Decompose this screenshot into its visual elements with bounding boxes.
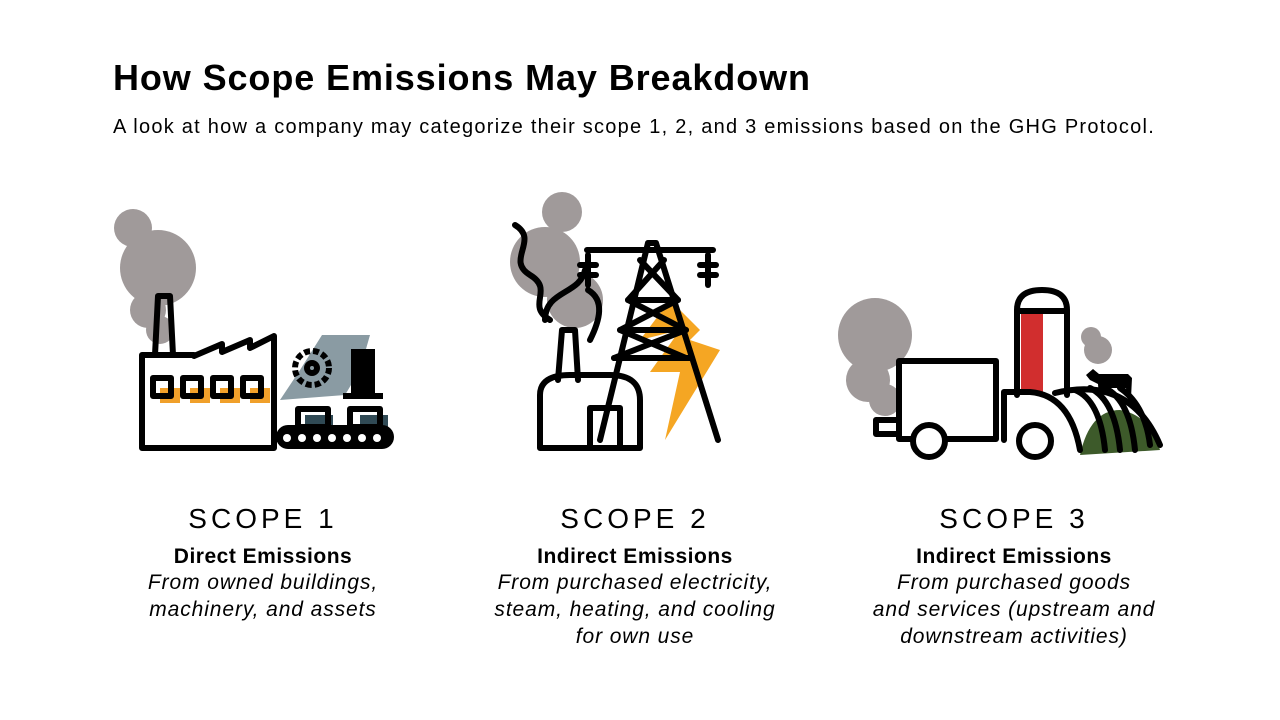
description: steam, heating, and cooling [494,598,776,621]
description: and services (upstream and [873,598,1155,621]
label: Direct Emissions [174,545,352,568]
description [148,571,378,621]
label: Indirect Emissions [537,545,733,568]
icon: truck and farm scope 3 [838,290,1160,457]
column: scope 3 [873,503,1155,648]
icon: power station scope 2 [510,192,720,448]
description [494,571,776,648]
description: for own use [576,625,694,648]
heading scope 2: SCOPE 2 [560,503,710,534]
heading scope 3: SCOPE 3 [939,503,1089,534]
label: Indirect Emissions [916,545,1112,568]
description: machinery, and assets [149,598,377,621]
heading scope 1: SCOPE 1 [188,503,338,534]
subtitle: A look at how a company may categorize their scope 1, 2, and 3 emissions based on the GHG Protocol. [113,116,1155,138]
description [873,571,1155,648]
column: scope 2 [494,503,776,648]
title: How Scope Emissions May Breakdown [113,57,811,98]
icon: factory scope 1 [114,209,394,449]
description: From purchased electricity, [498,571,772,594]
description: From owned buildings, [148,571,378,594]
description: From purchased goods [897,571,1131,594]
column: scope 1 [148,503,378,621]
description: downstream activities) [900,625,1128,648]
